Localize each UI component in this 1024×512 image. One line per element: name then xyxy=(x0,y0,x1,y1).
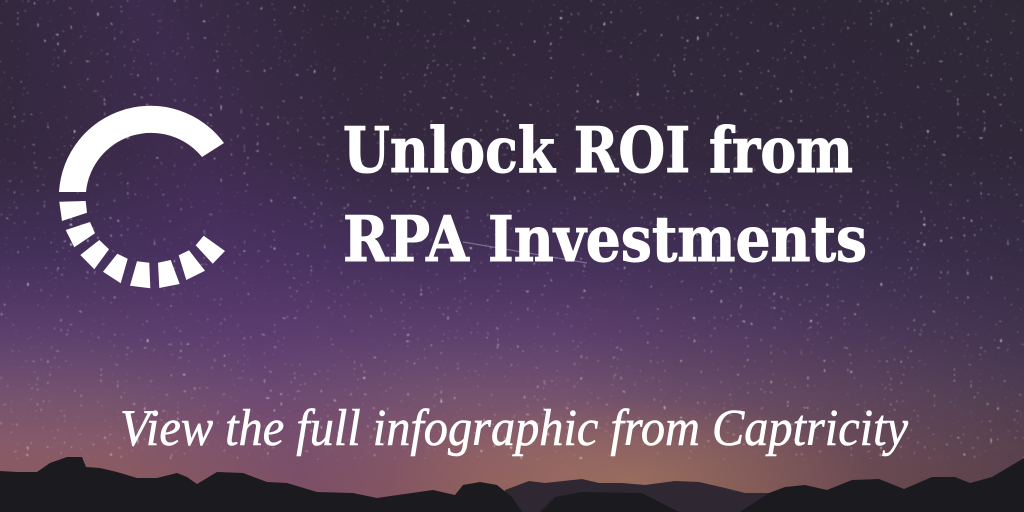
logo solid arc xyxy=(59,106,224,192)
distant mountain ridge xyxy=(505,479,800,512)
title line 2: RPA Investments xyxy=(343,202,867,276)
foreground mountain silhouette xyxy=(0,457,1024,512)
title xyxy=(343,113,867,276)
logo segmented arc xyxy=(59,201,225,288)
icon: Captricity logo xyxy=(59,106,225,288)
call to action subtitle: View the full infographic from Captricity xyxy=(120,400,909,457)
title line 1: Unlock ROI from xyxy=(343,113,853,187)
